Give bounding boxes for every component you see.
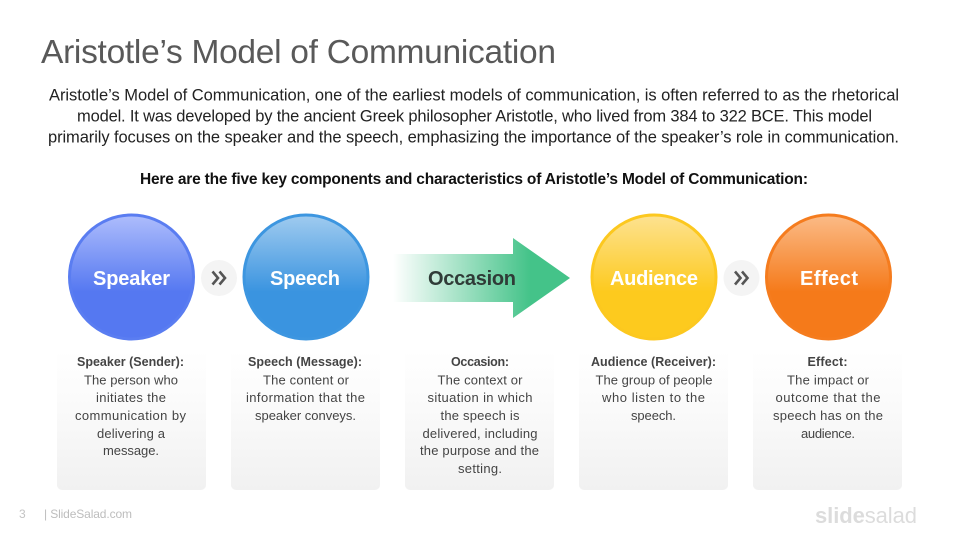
arrow: Occasion [393,238,570,318]
panel: Occasion description [405,350,554,490]
panel: Occasion description: the speech is [440,408,520,423]
panel: Occasion description: The context or [438,372,523,388]
panel: Effect description: outcome that the [776,390,880,405]
panel: Speaker description: The person who [84,372,178,388]
panel: Speaker description: Speaker (Sender): [77,355,184,369]
title: Aristotle’s Model of Communication [41,34,556,71]
panel: Occasion description: delivered, including [422,426,538,441]
panel: Audience description: The group of people [596,372,712,388]
node: Effect: Effect [800,268,858,290]
node: Speech: Speech [270,268,340,290]
panel: Speaker description: communication by [75,408,186,423]
panel: Audience description: Audience (Receiver): [591,355,716,369]
node: Speaker: Speaker [93,268,170,290]
intro paragraph [48,86,899,146]
subheading: Here are the five key components and characteristics of Aristotle’s Model of Communication: [140,171,808,188]
panel: Speech description: information that the [246,390,365,405]
panel: Occasion description: setting. [458,461,502,476]
node: Audience: Audience [610,268,698,290]
panel: Occasion description: situation in which [428,390,532,405]
icon: chevron connector 1 [201,260,237,296]
node: Audience [592,215,716,339]
panel: Effect description: Effect: [808,355,848,369]
panel: Speaker description: delivering a [97,426,166,441]
panel: Effect description: The impact or [787,372,870,388]
panel: Occasion description: the purpose and the [420,443,539,458]
panel: Speaker description [57,350,206,490]
panel: Speech description: Speech (Message): [248,355,362,369]
panel: Speaker description: initiates the [96,390,166,405]
footer source: | SlideSalad.com [44,507,132,521]
panel: Speaker description: message. [103,443,159,458]
panel: Audience description [579,350,728,490]
panel: Effect description: speech has on the [773,408,883,423]
node: Speaker [70,215,194,339]
panel: Audience description: who listen to the [601,390,705,405]
panel: Effect description: audience. [801,426,855,441]
page number: 3 [19,507,26,521]
panel: Audience description: speech. [631,408,676,423]
panel: Speech description: speaker conveys. [255,408,356,423]
arrow: Occasion: Occasion [428,268,516,290]
panel: Speech description: The content or [263,372,350,388]
panel: Speech description [231,350,380,490]
logo: slidesalad: slidesalad [815,503,917,528]
intro paragraph: model. It was developed by the ancient Greek philosopher Aristotle, who lived from 384 to 322 BCE. This model [77,108,872,126]
panel: Occasion description: Occasion: [451,355,509,369]
intro paragraph: Aristotle’s Model of Communication, one of the earliest models of communication, is often referred to as the rhetorical [49,86,899,104]
node: Speech [244,215,368,339]
intro paragraph: primarily focuses on the speaker and the speech, emphasizing the importance of the speaker’s role in communication. [48,128,899,146]
panel: Effect description [753,350,902,490]
node: Effect [766,215,890,339]
icon: chevron connector 2 [724,260,760,296]
